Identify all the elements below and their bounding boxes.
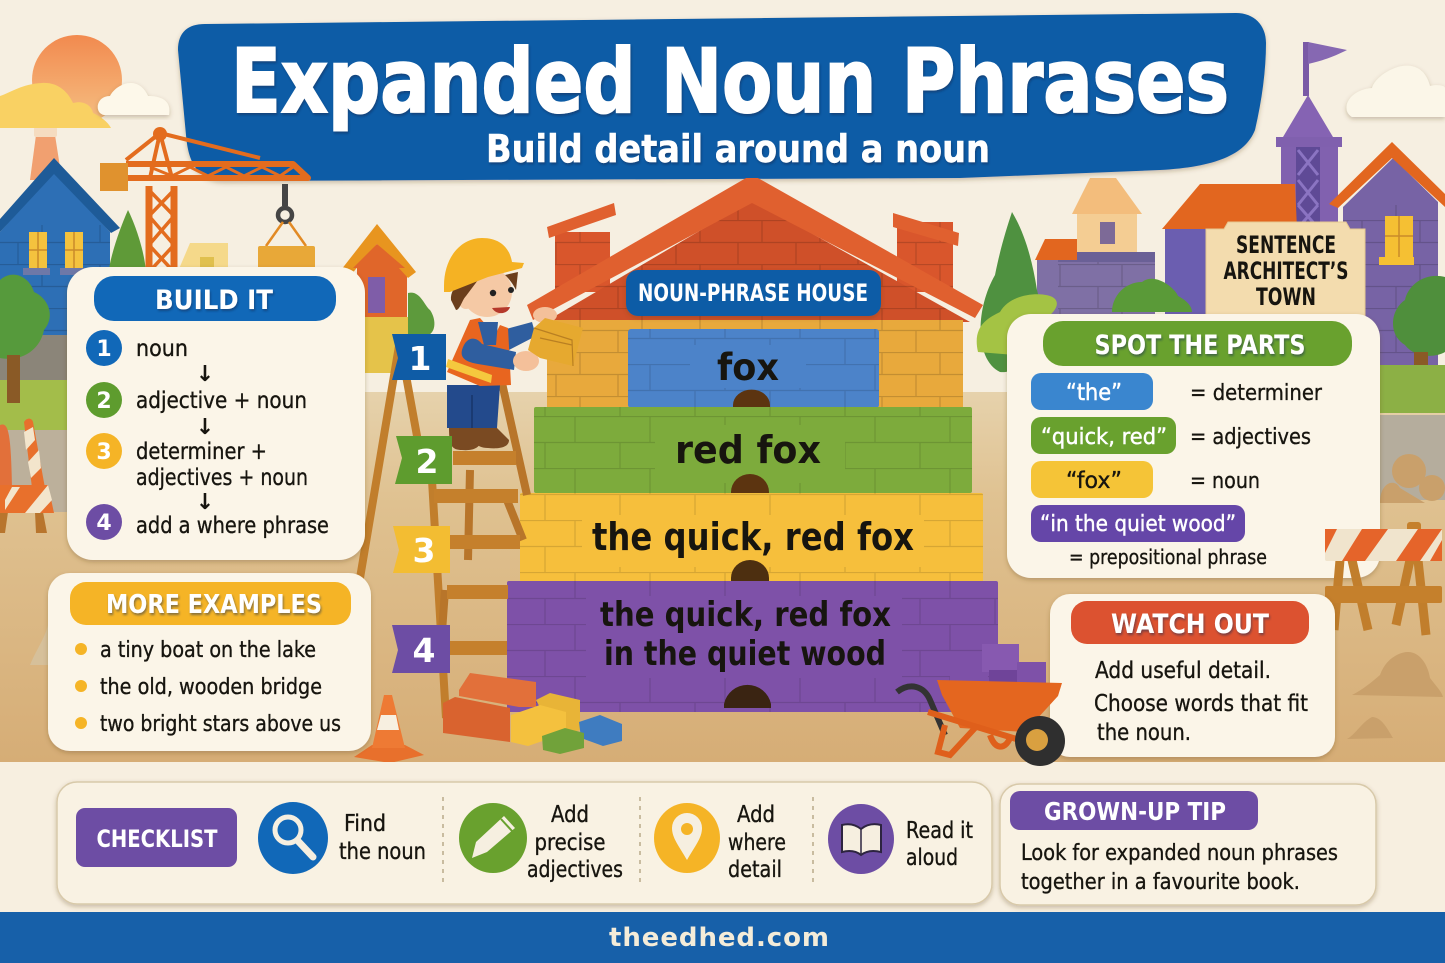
house label: NOUN-PHRASE HOUSE <box>638 279 868 307</box>
tip text <box>1021 841 1338 895</box>
peach house <box>1077 207 1137 254</box>
right road barrier <box>1325 522 1442 635</box>
white cloud right <box>1346 66 1445 117</box>
step 2: adjective + noun <box>136 388 307 414</box>
spot the parts heading: SPOT THE PARTS <box>1094 330 1306 361</box>
left tree <box>0 275 50 359</box>
ground <box>0 392 1445 762</box>
step 3: adjectives + noun <box>136 465 308 491</box>
grown-up tip heading <box>1010 791 1258 830</box>
watch out text: Choose words that fit <box>1094 691 1308 717</box>
icon: pencil <box>459 803 527 873</box>
purple block: full phrase: in the quiet wood <box>604 634 886 674</box>
blue block: fox <box>628 329 879 411</box>
arrow: ↓ <box>196 362 214 387</box>
arrow: ↓ <box>196 415 214 440</box>
step 2 flag <box>395 436 452 484</box>
counterweight <box>100 163 128 191</box>
panel: spot the parts <box>1007 314 1380 578</box>
left hedge and grey wall <box>0 380 68 432</box>
boots <box>449 428 480 450</box>
white cloud <box>98 83 169 115</box>
ladder <box>358 340 527 718</box>
watch out text <box>1094 658 1308 746</box>
purple stone house <box>1343 158 1438 380</box>
step 1: noun <box>136 336 188 362</box>
add where detail: Add <box>737 802 775 828</box>
in the quiet wood: prepositional phrase <box>1031 505 1267 569</box>
crane hub <box>153 127 167 141</box>
icon: map pin <box>654 803 720 873</box>
spot the parts heading <box>1043 321 1352 366</box>
watch out heading: WATCH OUT <box>1111 609 1269 640</box>
panel: build it <box>67 267 365 560</box>
build it heading <box>94 276 336 321</box>
dirt mounds <box>1347 454 1445 739</box>
right tree <box>1393 276 1445 356</box>
find the noun: the noun <box>339 839 426 865</box>
purple tower <box>1283 95 1333 137</box>
right hedge and grey wall <box>1380 365 1445 413</box>
step 2 flag: 2 <box>416 442 438 481</box>
grown-up tip heading: GROWN-UP TIP <box>1044 797 1226 826</box>
sign: Sentence Architect's Town <box>1206 222 1365 318</box>
right town scene: TOWN <box>1256 283 1316 311</box>
panel: watch out <box>1050 594 1335 757</box>
step 3 flag <box>393 526 450 573</box>
read it aloud <box>906 818 973 871</box>
small orange house <box>357 266 407 318</box>
hard hat <box>444 238 524 292</box>
footer bar <box>0 912 1445 963</box>
add precise adjectives: precise <box>534 830 606 856</box>
panel: grown-up tip <box>1000 784 1376 905</box>
watch out heading <box>1071 601 1309 644</box>
yellow cloud <box>0 83 111 128</box>
heading: Expanded Noun Phrases <box>231 30 1229 133</box>
roof <box>527 178 983 320</box>
brick pile <box>443 673 622 754</box>
read it aloud: Read it <box>906 818 973 844</box>
builder figure <box>444 238 583 450</box>
the: determiner: “the” <box>1066 380 1122 406</box>
right town scene: ARCHITECT’S <box>1224 257 1348 285</box>
green trees <box>981 212 1039 372</box>
crane <box>100 127 315 276</box>
bottom cream band <box>0 762 1445 912</box>
icon: open book <box>828 804 894 874</box>
step 4: add a where phrase <box>136 513 329 539</box>
watch out text: Add useful detail. <box>1095 658 1271 684</box>
green block: red fox <box>534 407 972 497</box>
hook and load <box>282 184 288 206</box>
icon: magnifier <box>258 802 328 874</box>
lavender house <box>1037 260 1155 314</box>
step 3: 3 <box>96 440 112 465</box>
wall behind top floor <box>547 320 963 408</box>
step 2 <box>86 382 307 418</box>
find the noun: Find <box>344 811 386 837</box>
purple block: full phrase: the quick, red fox <box>600 595 891 635</box>
example 1: a tiny boat on the lake <box>100 638 316 663</box>
step 1: 1 <box>96 337 112 362</box>
front arm <box>462 339 516 370</box>
step 3: determiner + <box>136 439 267 465</box>
fox: noun <box>1031 461 1260 498</box>
tip text: together in a favourite book. <box>1021 870 1300 895</box>
blue house <box>0 172 110 345</box>
step flags <box>392 334 452 673</box>
arrow: ↓ <box>196 490 214 515</box>
house label <box>626 270 881 316</box>
back arm <box>495 322 536 352</box>
find the noun <box>339 811 426 865</box>
blue-purple building <box>1165 229 1210 314</box>
panel: more examples <box>48 573 371 751</box>
step 3 <box>86 433 308 491</box>
more examples heading <box>70 582 351 625</box>
subheading: Build detail around a noun <box>486 127 990 171</box>
checklist label <box>76 808 237 867</box>
right town scene: SENTENCE <box>1236 231 1336 259</box>
yellow block: the quick, red fox: the quick, red fox <box>592 515 914 559</box>
flag <box>1303 42 1309 96</box>
in the quiet wood: prepositional phrase: “in the quiet wood” <box>1040 512 1236 537</box>
fox: noun: = noun <box>1190 469 1260 494</box>
gable wall <box>545 200 970 322</box>
add precise adjectives: adjectives <box>527 857 623 883</box>
add where detail: detail <box>728 857 782 883</box>
checklist label: CHECKLIST <box>96 825 218 853</box>
step 2: 2 <box>96 389 112 414</box>
in the quiet wood: prepositional phrase: = prepositional phrase <box>1069 545 1267 569</box>
lighthouse tower <box>30 135 62 180</box>
quick red: adjectives <box>1031 417 1311 454</box>
step 1 flag <box>392 334 446 380</box>
legs <box>447 385 500 428</box>
noun-phrase house <box>507 178 998 712</box>
fox: noun: “fox” <box>1066 468 1122 494</box>
head <box>459 295 473 309</box>
safety vest <box>447 318 511 386</box>
blue block: fox: fox <box>717 346 779 389</box>
tip text: Look for expanded noun phrases <box>1021 841 1338 866</box>
sun <box>32 35 122 125</box>
green block: red fox: red fox <box>675 428 821 472</box>
yellow block: the quick, red fox <box>520 493 983 582</box>
title banner <box>178 13 1266 181</box>
add where detail <box>728 802 786 883</box>
add where detail: where <box>728 830 786 856</box>
quick red: adjectives: = adjectives <box>1190 425 1311 450</box>
step 3 flag: 3 <box>413 531 435 570</box>
add precise adjectives <box>527 802 623 883</box>
orange roof block <box>1162 184 1297 229</box>
website: theedhed.com <box>609 923 829 953</box>
step 4: 4 <box>96 511 112 536</box>
example 3: two bright stars above us <box>100 712 341 737</box>
traffic cone <box>354 695 424 763</box>
add precise adjectives: Add <box>551 802 589 828</box>
read it aloud: aloud <box>906 845 958 871</box>
step 1 flag: 1 <box>409 339 431 378</box>
build it heading: BUILD IT <box>155 285 274 316</box>
tree behind crane <box>108 210 146 276</box>
quick red: adjectives: “quick, red” <box>1041 425 1167 450</box>
the: determiner <box>1031 373 1323 410</box>
step 1 <box>86 330 188 366</box>
left town scene <box>0 35 434 512</box>
yellow ruin <box>176 243 228 276</box>
right town scene <box>977 42 1445 500</box>
left road barrier <box>0 419 54 533</box>
example 2: the old, wooden bridge <box>100 675 322 700</box>
panel: checklist <box>57 782 992 904</box>
more examples heading: MORE EXAMPLES <box>106 590 322 620</box>
chimneys <box>555 232 610 292</box>
purple block: full phrase <box>507 581 998 712</box>
step 4 <box>86 504 329 540</box>
the: determiner: = determiner <box>1190 381 1323 406</box>
watch out text: the noun. <box>1097 720 1191 746</box>
step 4 flag <box>392 625 450 673</box>
hands <box>513 351 539 371</box>
step 4 flag: 4 <box>413 631 435 670</box>
wheelbarrow <box>897 644 1065 766</box>
yellow brick held <box>528 318 583 366</box>
left dirt mound <box>30 625 48 665</box>
